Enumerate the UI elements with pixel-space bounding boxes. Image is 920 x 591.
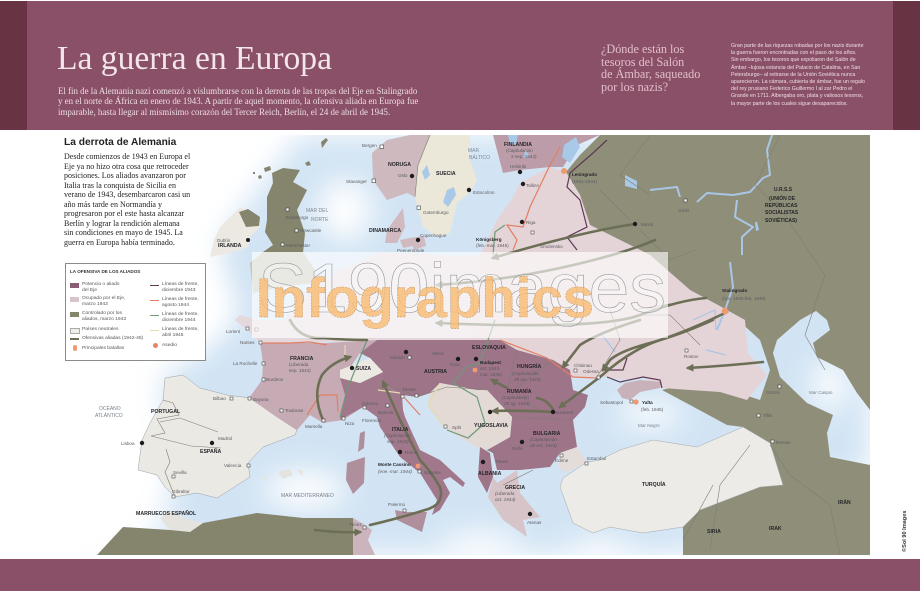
swatch: allied	[70, 312, 79, 317]
sidebar text: del rey prusiano Federico Guillermo I al zar Pedro el	[731, 86, 852, 92]
city and date labels: Atenas	[527, 520, 542, 525]
country labels: FRANCIA	[290, 356, 314, 362]
legend text: Axis: del Eje	[82, 288, 97, 293]
title: La guerra en Europa	[57, 40, 332, 77]
country labels: ESLOVAQUIA	[472, 345, 506, 351]
assault and battle markers	[416, 168, 728, 468]
country labels: TURQUÍA	[642, 480, 666, 488]
city and date labels: Odessa	[583, 369, 599, 374]
land: occupied USSR	[470, 167, 767, 400]
sidebar question: ¿Dónde están los	[601, 42, 684, 56]
city and date labels: Newcastle	[300, 228, 322, 233]
watermark veil	[252, 252, 668, 338]
legend text: Dec 1943: diciembre 1943	[162, 288, 195, 293]
city and date labels: MAR DEL	[306, 208, 328, 214]
legend text: Dec 1944: Líneas de frente,	[162, 312, 199, 317]
swatch: occupied	[70, 297, 79, 302]
legend text: battles: Principales batallas	[82, 346, 124, 351]
country labels: BULGARIA	[533, 431, 561, 437]
city and date labels: Toulouse	[285, 408, 304, 413]
city and date labels: (1941-1944)	[572, 179, 597, 184]
city and date labels: NORTE	[311, 217, 329, 223]
legend text: Axis: Potencia o aliado	[82, 282, 120, 287]
article text: Desde comienzos de 1943 en Europa el	[64, 152, 190, 161]
city and date labels: Bayona	[253, 397, 269, 402]
city and date labels: Madrid	[218, 436, 232, 441]
city and date labels: Bucarest	[555, 410, 574, 415]
article text: sin condiciones en mayo de 1945. La	[64, 228, 183, 237]
land: Sweden	[415, 135, 477, 237]
country labels: ESPAÑA	[200, 448, 221, 455]
sidebar text: Ámbar –lujosa estancia del Palacio de Catalina, en San	[731, 65, 860, 71]
sea	[145, 135, 870, 555]
swatch: assault	[153, 343, 158, 348]
legend text: Dec 1943	[162, 282, 199, 293]
city and date labels: Mar Negro	[638, 423, 660, 428]
sidebar question: por los nazis?	[601, 80, 668, 94]
city and date labels: Oslo	[398, 173, 408, 178]
legend text: allied: Controlado por los	[82, 311, 122, 316]
country labels: SOVIÉTICAS)	[765, 216, 797, 224]
country labels: SIRIA	[707, 529, 721, 535]
city and date labels: BÁLTICO	[469, 154, 490, 161]
country labels: U.R.S.S	[774, 187, 793, 193]
city and date labels: Bilbao	[213, 396, 226, 401]
land: Denmark	[385, 208, 426, 250]
watermark: S190images: S190images	[258, 249, 666, 327]
intro text	[58, 86, 418, 117]
city and date labels: Tiflis	[763, 413, 773, 418]
city and date labels: Graz	[450, 362, 461, 367]
article block	[64, 137, 190, 247]
country labels: ITALIA	[392, 427, 409, 433]
city and date labels: oct. 1944)	[495, 497, 516, 502]
legend text: Apr 1945: abril 1945	[162, 333, 183, 338]
article text: Berlín y lograr la rendición alemana	[64, 218, 180, 228]
legend text: occupied: Ocupado por el Eje,	[82, 296, 125, 301]
country labels: SUECIA	[436, 171, 456, 177]
land: Shetland islands	[253, 138, 328, 179]
sidebar text: Petersburgo– al retirarse de la Unión Soviética nunca	[731, 72, 855, 78]
city and date labels: sep. 1943)	[387, 439, 409, 444]
sidebar text: aparecieron. La cámara, cubierta de ámbar, fue un regalo	[731, 79, 865, 85]
country labels: YUGOSLAVIA	[474, 423, 508, 429]
sidebar text	[731, 43, 865, 107]
city and date labels: (Capitulación	[502, 395, 529, 400]
city and date labels: Viena	[432, 351, 444, 356]
front line: December 1943	[567, 140, 662, 388]
legend text: occupied	[82, 296, 125, 307]
swatch: line Dec 1944	[150, 315, 159, 316]
sidebar text: Grande en 1711. Albergaba oro, plata y valiosos tesoros,	[731, 93, 863, 99]
right dark strip	[893, 1, 920, 130]
land: Italy	[340, 372, 465, 515]
city and date labels: Estambul	[587, 456, 606, 461]
article text: Italia tras la conquista de Sicilia en	[64, 180, 176, 190]
city and date labels: 2 sep. 1944)	[511, 154, 537, 159]
article text: posiciones. Los aliados avanzaron por	[64, 171, 186, 180]
sidebar text: Sin embargo, los tesoros que expoliaron del Salón de	[731, 57, 856, 63]
city and date labels: (feb. 1945)	[641, 407, 664, 412]
swatch: line Apr 1945	[150, 330, 159, 331]
front line: August 1944	[263, 147, 597, 415]
city and date labels: Gotemburgo	[423, 210, 449, 215]
legend text: Aug 1944: agosto 1944	[162, 303, 189, 308]
legend text: Aug 1944	[162, 296, 199, 308]
land: southern England	[250, 252, 315, 293]
land: Thrace	[558, 447, 587, 473]
country labels: NORUGA	[388, 162, 411, 168]
city and date labels: Nápoles	[424, 470, 442, 475]
country labels: Yalta	[642, 400, 653, 405]
city and date labels: Trieste	[402, 387, 416, 392]
country labels: IRÁN	[838, 499, 851, 506]
city and date labels: Peenemünde	[397, 248, 425, 253]
country labels: MARRUECOS ESPAÑOL	[136, 510, 197, 517]
city and date labels: Copenhague	[420, 233, 447, 238]
land: France	[249, 340, 377, 430]
country labels: Budapest	[480, 360, 501, 365]
land: northern France and Low Countries	[235, 253, 480, 343]
city and date labels: mar. 1945)	[480, 372, 502, 377]
land: Greece	[488, 470, 540, 537]
rivers and lakes	[600, 135, 772, 355]
article text: Eje ya no hizo otra cosa que retroceder	[64, 162, 189, 170]
city and date labels: Smolensko	[540, 244, 563, 249]
city and date labels: Sebastopol	[600, 400, 623, 405]
city and date labels: MAR MEDITERRÁNEO	[281, 492, 334, 499]
land: Crimea	[617, 380, 662, 400]
header band	[0, 1, 920, 130]
city and date labels: Edirne	[555, 458, 569, 463]
intro text: y en el norte de África en enero de 1943. A partir de aquel momento, la ofensiva aliada en Europa fue	[58, 96, 418, 106]
city and date labels: Bolonia	[378, 410, 394, 415]
city and date labels: Nantes	[240, 340, 255, 345]
land: Ireland	[210, 207, 260, 257]
city and date labels: (Capitulación	[506, 148, 533, 153]
city and date labels: OCÉANO	[99, 405, 121, 412]
sidebar text: la guerra fueron encontradas con el paso de los años.	[731, 50, 857, 56]
land: Northern Ireland	[239, 209, 260, 227]
city and date labels: 28 oct. 1944)	[529, 443, 557, 448]
legend text: Dec 1943: Líneas de frente,	[162, 282, 199, 287]
country labels: (UNIÓN DE	[769, 194, 796, 202]
legend text: Apr 1945: Líneas de frente,	[162, 327, 199, 332]
city and date labels: Florencia	[362, 418, 381, 423]
city and date labels: Palermo	[388, 502, 406, 507]
city and date labels: La Rochelle	[233, 361, 258, 366]
legend text: Axis	[82, 282, 120, 293]
city and date labels: Valencia	[224, 463, 242, 468]
land: USSR	[566, 135, 870, 555]
front line: April 1945	[345, 345, 445, 428]
country labels: PORTUGAL	[151, 409, 181, 415]
city and date labels: Múnich	[390, 355, 405, 360]
city and date labels: Tallinn	[526, 183, 539, 188]
city and date labels: Sevilla	[173, 470, 187, 475]
legend text: neutral: Países neutrales	[82, 327, 118, 332]
land: Turkey	[560, 427, 783, 533]
city and date labels: Gorki	[678, 208, 689, 213]
city and date labels: Dublín	[217, 238, 231, 243]
intro text: El fin de la Alemania nazi comenzó a vislumbrarse con la derrota de las tropas del Eje en Stalingrado	[58, 86, 417, 96]
country labels: GRECIA	[505, 485, 525, 491]
land: Finland	[493, 135, 600, 173]
land: Yugoslavia	[428, 383, 512, 450]
article text: año más tarde en Normandía y	[64, 200, 162, 208]
city and date labels: oct. 1944-	[480, 366, 501, 371]
country labels: IRAK	[769, 526, 782, 532]
watermark: Infographics: Infographics	[256, 266, 594, 329]
article text: progresaron por el este hasta alcanzar	[64, 209, 184, 218]
country labels: Königsberg	[476, 237, 502, 242]
country labels: IRLANDA	[218, 243, 242, 249]
country labels: DINAMARCA	[369, 228, 401, 234]
land: Tunisia	[353, 518, 375, 555]
city and date labels	[95, 143, 833, 527]
map of Europe	[95, 135, 870, 555]
legend text: Dec 1944	[162, 312, 199, 323]
capital markers	[140, 170, 637, 516]
land: Switzerland	[340, 358, 383, 383]
intro text: imparable, hasta llegar al mismísimo corazón del Tercer Reich, Berlín, el 24 de abril de 1945.	[58, 107, 390, 117]
city and date labels: Edimburgo	[286, 215, 309, 220]
legend text: allied	[82, 310, 126, 322]
city and date labels: Gibraltar	[172, 489, 190, 494]
city and date labels: sep. 1944)	[289, 368, 311, 373]
front line: December 1944	[340, 225, 505, 438]
city and date labels: Lisboa	[121, 441, 135, 446]
city and date labels: Mar Caspio	[809, 390, 833, 395]
lakes	[422, 135, 759, 231]
city and date labels: Minsk	[641, 222, 654, 227]
swatch: line Aug 1944	[150, 300, 159, 301]
city and date labels: (ene.-mar. 1944)	[378, 469, 413, 474]
city and date labels: Estocolmo	[473, 190, 495, 195]
country labels: FINLANDIA	[504, 142, 532, 148]
legend text: offensive: Ofensivas aliadas (1942-45)	[82, 336, 143, 341]
swatch: offensive arrow	[70, 338, 79, 340]
city and date labels: Chisinau	[574, 363, 592, 368]
credit: ©Sol 90 Images	[902, 511, 908, 552]
city and date labels: (Liberada	[289, 362, 309, 367]
land: North Africa	[97, 513, 353, 555]
city and date labels: Burdeos	[266, 377, 284, 382]
sidebar text: Gran parte de las riquezas robadas por los nazis durante	[731, 43, 864, 49]
city and date labels: Tirana	[495, 459, 508, 464]
swatch: battles	[73, 345, 77, 351]
legend text: Aug 1944: Líneas de frente,	[162, 297, 199, 302]
article text: verano de 1943, desembarcaron casi un	[64, 190, 190, 199]
article text	[64, 152, 190, 247]
legend text: allied: aliados, marzo 1943	[82, 317, 126, 322]
city and date labels: ATLÁNTICO	[95, 412, 123, 419]
country labels	[136, 142, 851, 535]
city and date labels: Stavanger	[346, 179, 367, 184]
article text: guerra en Europa había terminado.	[64, 238, 175, 246]
country labels: Monte Cassino	[378, 462, 411, 467]
sidebar text: la mayor parte de los cuales sigue desaparecidos.	[731, 101, 848, 107]
land: Britain	[263, 168, 307, 253]
city and date labels: Erevan	[776, 440, 791, 445]
city and date labels: MAR	[468, 148, 480, 154]
city and date labels: 28 oct. 1944)	[513, 377, 541, 382]
city and date labels: Bergen	[362, 143, 377, 148]
city and date labels: (feb.-mar. 1945)	[476, 243, 509, 248]
legend text: assault: Asedio	[162, 343, 177, 348]
country labels: Stalingrado	[722, 288, 747, 293]
national borders	[151, 135, 840, 555]
city and date labels: Sofía	[512, 446, 523, 451]
city and date labels: Niza	[345, 421, 355, 426]
sidebar question: tesoros del Salón	[601, 55, 684, 69]
country labels: SOCIALISTAS	[765, 210, 799, 216]
land: Spain and Portugal	[138, 375, 297, 498]
swatch: Axis	[70, 283, 79, 288]
city and date labels: (Capitulación	[512, 371, 539, 376]
land: Albania	[478, 447, 493, 493]
city and date labels: Manchester	[286, 243, 310, 248]
country labels: Leningrado	[572, 172, 597, 177]
legend	[65, 263, 206, 361]
article heading: La derrota de Alemania	[64, 137, 176, 148]
land: small islands	[263, 469, 303, 481]
city markers	[172, 145, 781, 529]
city and date labels: Riga	[526, 220, 536, 225]
swatch: neutral	[70, 328, 80, 334]
country labels: ALBANIA	[478, 471, 502, 477]
city and date labels: Helsinki	[510, 164, 526, 169]
country labels: HUNGRÍA	[517, 362, 541, 370]
city and date labels: Génova	[362, 401, 379, 406]
legend title: LA OFENSIVA DE LOS ALIADOS	[70, 269, 140, 274]
land: Spanish Morocco	[160, 510, 203, 532]
city and date labels: (Liberada	[495, 491, 515, 496]
sidebar question	[601, 42, 700, 94]
country labels: RUMANÍA	[507, 387, 532, 395]
swatch: line Dec 1943	[150, 285, 159, 286]
left dark strip	[0, 1, 27, 130]
country labels: REPÚBLICAS	[765, 202, 798, 209]
sidebar question: de Ámbar, saqueado	[601, 67, 700, 81]
land: Germany, Austria, Balkans	[360, 340, 588, 470]
city and date labels: (Capitulación	[384, 433, 411, 438]
legend text: Apr 1945	[162, 326, 199, 338]
country labels: AUSTRIA	[424, 369, 447, 375]
land: Norway	[372, 135, 430, 200]
city and date labels: Marsella	[305, 424, 323, 429]
footer band	[0, 559, 920, 591]
offensive arrows	[290, 224, 763, 532]
city and date labels: Túnez	[349, 522, 362, 527]
city and date labels: (nov. 1942-feb. 1945)	[722, 296, 766, 301]
legend text: Dec 1944: diciembre 1944	[162, 318, 195, 323]
city and date labels: Rostov	[684, 354, 699, 359]
city and date labels: Grozni	[766, 390, 780, 395]
land: Mediterranean islands	[346, 431, 427, 532]
city and date labels: Lorient	[226, 329, 241, 334]
city and date labels: (Capitulación	[530, 437, 557, 442]
city and date labels: Roma	[405, 450, 418, 455]
city and date labels: Split	[452, 425, 462, 430]
country labels: SUIZA	[356, 366, 371, 372]
city and date labels: 26 ag. 1944)	[503, 401, 530, 406]
legend text: occupied: marzo 1943	[82, 302, 108, 307]
